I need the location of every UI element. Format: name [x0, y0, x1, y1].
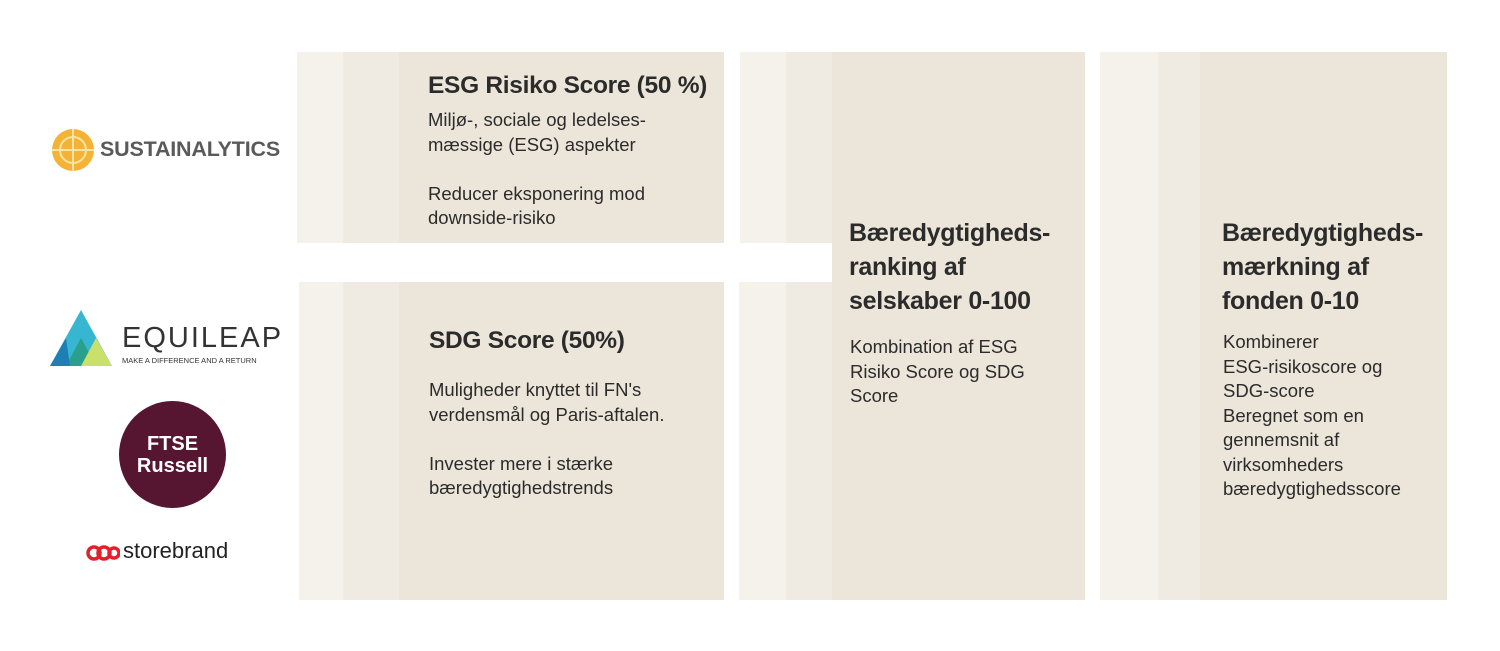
text: ESG description: [428, 109, 646, 228]
logo: equileap: [50, 310, 283, 366]
text: SDG description: verdensmål og Paris-aftalen.: [429, 404, 664, 424]
logo: sustainalytics: [52, 129, 280, 171]
heading: fund labelling: mærkning af: [1222, 253, 1369, 281]
text: ESG description: Miljø-, sociale og ledelses-: [428, 109, 646, 130]
panel: company ranking: [739, 52, 1085, 600]
heading: ranking: Bæredygtigheds-: [849, 219, 1050, 247]
text: ESG description: mæssige (ESG) aspekter: [428, 134, 636, 154]
heading: ESG Risiko Score: ESG Risiko Score (50 %): [428, 72, 707, 99]
text: fund description: Kombinerer: [1223, 331, 1319, 352]
logo: storebrand: storebrand: [123, 538, 228, 563]
heading: fund labelling: fonden 0-10: [1222, 287, 1359, 315]
text: fund description: bæredygtighedsscore: [1223, 478, 1401, 499]
logo: sustainalytics: SUSTAINALYTICS: [100, 137, 280, 161]
heading: SDG Score: SDG Score (50%): [429, 327, 625, 354]
logo: equileap: EQUILEAP: [122, 322, 283, 354]
panel: ESG risiko score: [297, 52, 724, 243]
text: fund description: [1223, 331, 1401, 499]
text: fund description: Beregnet som en: [1223, 404, 1364, 426]
text: ranking description: Risiko Score og SDG: [850, 360, 1025, 382]
heading: ranking: [849, 219, 1050, 315]
logo: FTSE Russell: FTSE: [147, 432, 198, 454]
text: SDG description: bæredygtighedstrends: [429, 477, 613, 498]
text: SDG description: Invester mere i stærke: [429, 452, 613, 474]
text: SDG description: Muligheder knyttet til FN's: [429, 379, 641, 400]
text: ranking description: Kombination af ESG: [850, 336, 1018, 357]
logo: equileap: MAKE A DIFFERENCE AND A RETURN: [122, 356, 257, 365]
text: ESG description: Reducer eksponering mod: [428, 182, 645, 204]
panel: fund labelling: [1100, 52, 1447, 600]
text: fund description: virksomheders: [1223, 454, 1343, 474]
text: ESG description: downside-risiko: [428, 207, 556, 228]
heading: fund labelling: Bæredygtigheds-: [1222, 219, 1423, 247]
text: SDG description: [429, 379, 664, 498]
panel: SDG score: [299, 282, 724, 600]
text: fund description: ESG-risikoscore og: [1223, 356, 1382, 376]
heading: ranking: selskaber 0-100: [849, 287, 1031, 315]
text: fund description: SDG-score: [1223, 380, 1314, 401]
heading: ranking: ranking af: [849, 253, 965, 281]
logo: FTSE Russell: [119, 401, 226, 508]
text: ranking description: Score: [850, 385, 898, 406]
heading: fund labelling: [1222, 219, 1423, 315]
text: ranking description: [850, 336, 1025, 406]
logo: FTSE Russell: Russell: [137, 454, 208, 476]
text: fund description: gennemsnit af: [1223, 429, 1339, 450]
